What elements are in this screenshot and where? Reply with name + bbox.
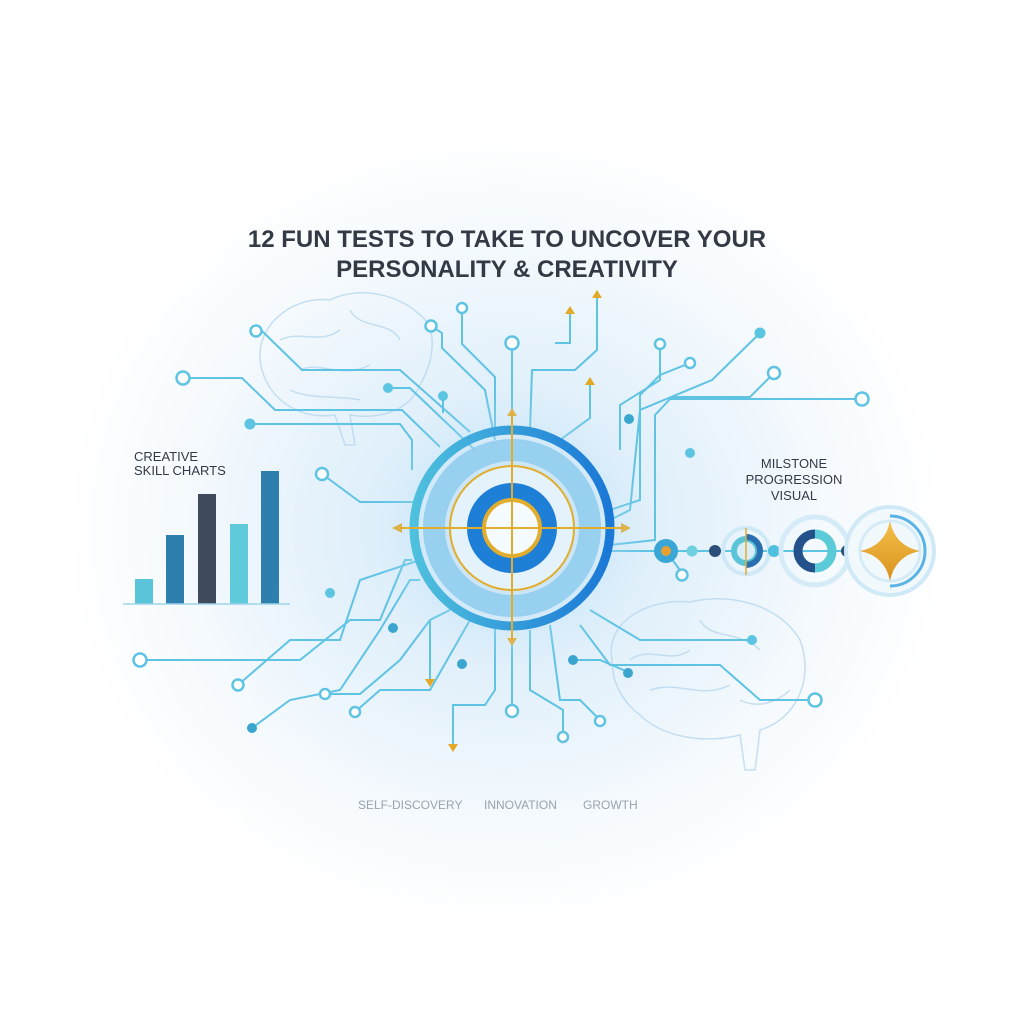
central target	[372, 388, 652, 668]
arrows: gold	[392, 290, 631, 752]
footer keywords: GROWTH	[583, 798, 638, 812]
title: PERSONALITY & CREATIVITY	[336, 256, 678, 283]
milestone progression visual: VISUAL	[771, 488, 817, 503]
title	[248, 226, 766, 283]
footer keywords	[358, 798, 638, 812]
brain: top left	[260, 293, 432, 445]
milestone progression visual	[654, 456, 934, 595]
title: 12 FUN TESTS TO TAKE TO UNCOVER YOUR	[248, 226, 766, 253]
bar chart: creative skill charts	[123, 449, 290, 604]
milestone progression visual: MILSTONE	[761, 456, 827, 471]
bar chart: creative skill charts: SKILL CHARTS	[134, 463, 226, 478]
milestone progression visual: PROGRESSION	[746, 472, 842, 487]
brain: bottom right	[611, 599, 805, 770]
footer keywords: INNOVATION	[484, 798, 557, 812]
circuit nodes	[134, 303, 868, 742]
bar chart: creative skill charts: CREATIVE	[134, 449, 198, 464]
circuit lines	[140, 297, 900, 746]
footer keywords: SELF-DISCOVERY	[358, 798, 462, 812]
